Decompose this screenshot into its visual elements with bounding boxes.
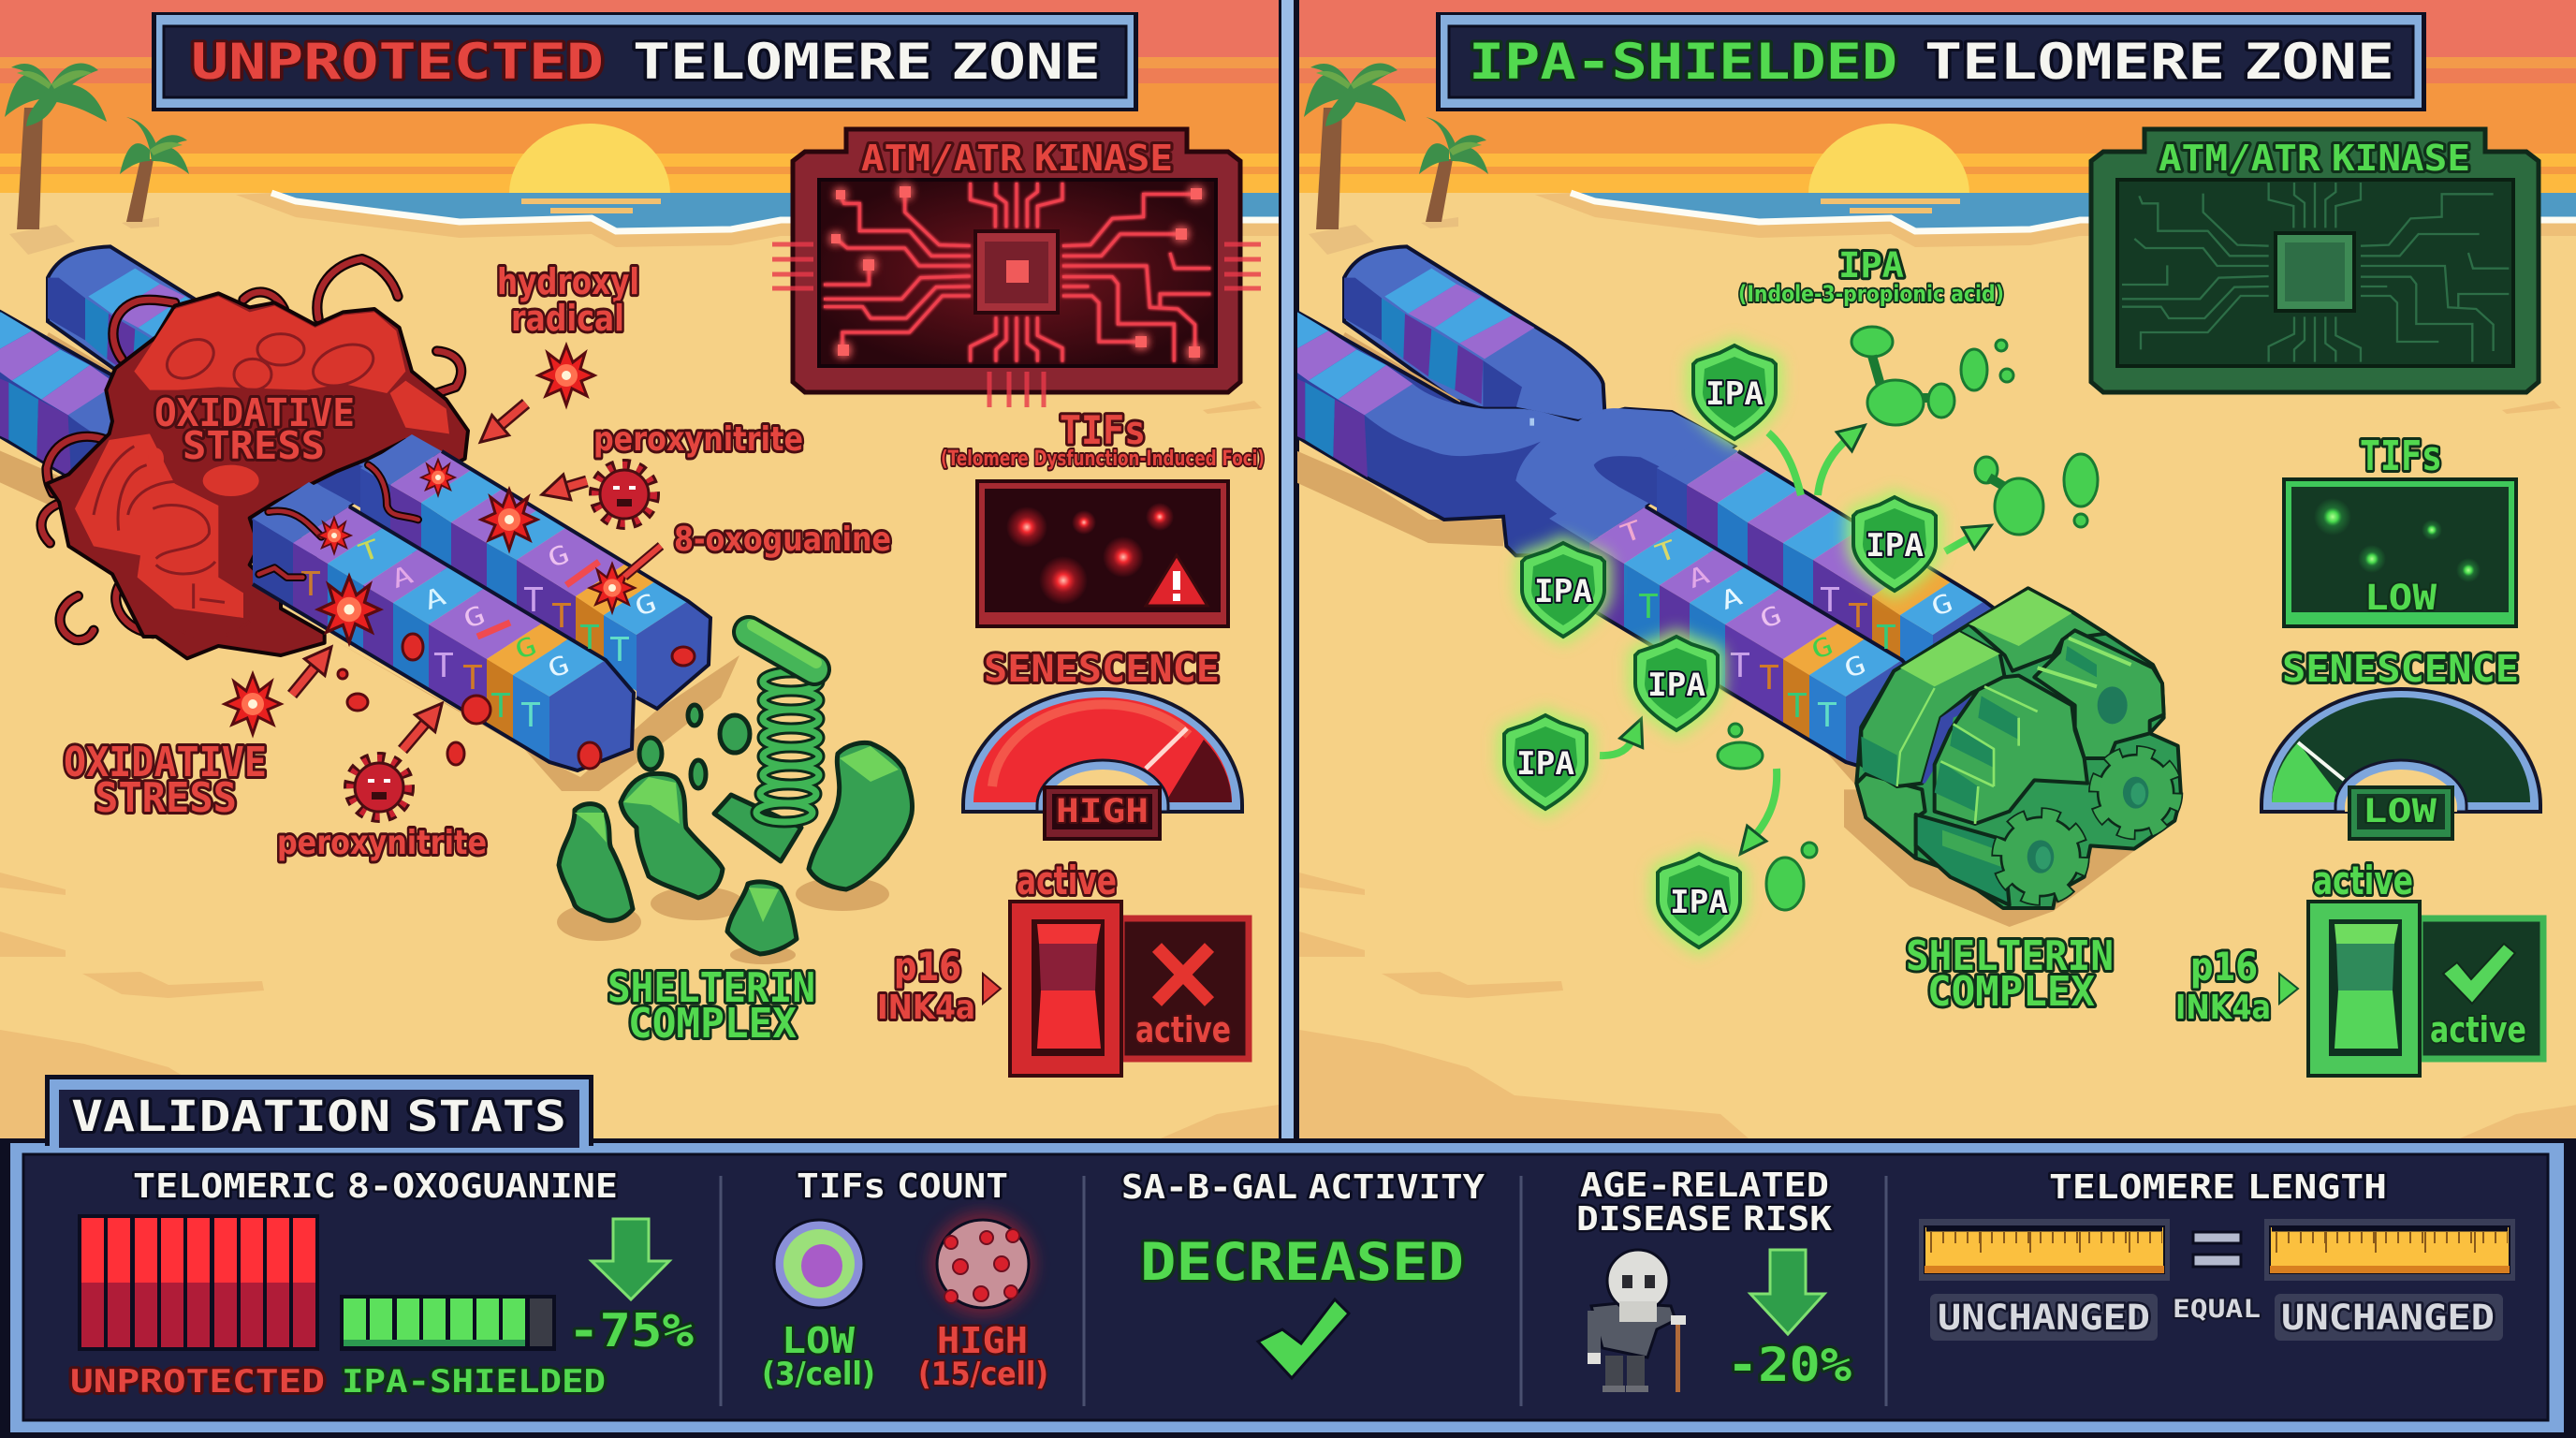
title: IPA-shielded — [1436, 12, 2426, 111]
telomere letters right: G — [1927, 587, 1956, 623]
cell labels: (3/cell) — [762, 1356, 875, 1393]
burst: small damage lower — [317, 518, 351, 553]
p16 label: p16 — [894, 944, 961, 990]
telomere letters left: T — [490, 687, 511, 726]
label: oxidative stress lower — [63, 742, 268, 814]
telomere letters right: T — [1876, 619, 1896, 657]
circuit traces red — [824, 183, 1210, 362]
icon: equals sign — [2193, 1232, 2241, 1267]
stat: age-related disease risk: DISEASE RISK — [1576, 1200, 1832, 1239]
telomere letters left: T — [433, 647, 454, 685]
ruler: unprotected — [1919, 1219, 2170, 1281]
stat: age-related disease risk: AGE-RELATED — [1580, 1167, 1829, 1205]
switch label: active — [2430, 1009, 2526, 1050]
title: unprotected — [152, 12, 1138, 111]
panel divider — [1279, 0, 1297, 1148]
badge: unchanged right: UNCHANGED — [2281, 1298, 2495, 1338]
TIFs panel green — [2284, 479, 2516, 626]
stat: telomere length: TELOMERE LENGTH — [2049, 1168, 2387, 1207]
telomere legs left — [253, 434, 710, 770]
cell labels: LOW — [782, 1320, 855, 1361]
stat dividers — [721, 1176, 1886, 1406]
telomere letters left: A — [420, 580, 449, 616]
shield: IPA 1 — [1693, 345, 1776, 439]
cell labels — [762, 1320, 1048, 1393]
telomere assembly right — [1279, 246, 2007, 770]
icon: peroxynitrite upper — [595, 465, 653, 523]
label: shelterin complex right: COMPLEX — [1927, 968, 2095, 1016]
panel: IPA-shielded telomere zone — [1279, 0, 2576, 1138]
stat: TIFs count — [762, 1167, 1048, 1393]
stat: TIFs count: TIFs COUNT — [797, 1167, 1008, 1206]
icon: check mark — [2443, 944, 2515, 1004]
label: oxidative stress in cloud: OXIDATIVE — [154, 390, 355, 435]
title: unprotected: TELOMERE ZONE — [633, 34, 1101, 91]
label: oxidative stress lower: STRESS — [95, 774, 237, 822]
title: IPA-shielded: TELOMERE ZONE — [1925, 34, 2394, 91]
label: oxidative stress in cloud — [154, 395, 356, 462]
shelterin shadow — [1844, 789, 2174, 927]
gauge value: LOW — [2363, 793, 2437, 830]
badge: unchanged left: UNCHANGED — [1938, 1298, 2150, 1338]
p16 label: p16 — [2190, 944, 2258, 990]
beach background right — [1299, 0, 2576, 1138]
damage marks on telomere — [338, 562, 695, 769]
label: ATM/ATR kinase: ATM/ATR KINASE — [861, 138, 1173, 179]
intact shelterin complex — [1844, 588, 2181, 927]
telomere letters right: T — [1617, 514, 1646, 550]
cloud lobes — [75, 297, 449, 618]
value: decreased: DECREASED — [1140, 1232, 1464, 1292]
TIFs heading — [941, 407, 1265, 471]
p16 label — [877, 944, 975, 1027]
arrows toward telomere — [292, 404, 661, 750]
label above switch: active — [2313, 858, 2413, 903]
telomere letters left: T — [520, 697, 541, 735]
stat: telomeric 8-oxoguanine: TELOMERIC 8-OXOGUANINE — [133, 1167, 618, 1206]
arrow to switch — [2279, 974, 2298, 1004]
label: shelterin complex — [607, 968, 816, 1041]
telomere letters left: T — [609, 631, 630, 669]
telomere letters left: T — [579, 619, 600, 657]
label: IPA name — [1738, 245, 2004, 307]
tendrils over telomere — [259, 465, 418, 578]
label: peroxynitrite upper: peroxynitrite — [593, 420, 803, 459]
TIFs heading green: TIFs — [2360, 433, 2442, 480]
ruler: IPA-shielded — [2264, 1219, 2515, 1281]
shield: IPA 6: IPA — [1670, 884, 1728, 921]
icon: damaged cell — [930, 1211, 1035, 1316]
TIFs heading: (Telomere Dysfunction-Induced Foci) — [941, 448, 1265, 471]
burst: damage on back strand — [481, 490, 537, 550]
shield: IPA 4 — [1635, 637, 1718, 730]
chip red — [973, 229, 1060, 315]
telomere letters right: T — [1638, 588, 1659, 626]
upper gear — [2034, 630, 2164, 758]
telomere letters right: A — [1717, 580, 1746, 616]
label: equal: EQUAL — [2173, 1295, 2261, 1324]
icon: healthy cell — [774, 1220, 864, 1308]
p16 label: INK4a — [2175, 989, 2271, 1027]
arrow: down 75 — [592, 1219, 669, 1299]
telomere letters left: T — [300, 565, 321, 604]
shelterin solid silhouette — [1856, 588, 2181, 908]
telomere letters left: T — [551, 597, 572, 636]
cell labels: (15/cell) — [918, 1356, 1048, 1393]
telomere letters left — [300, 533, 660, 735]
stat: SA-B-GAL activity: SA-B-GAL ACTIVITY — [1121, 1168, 1485, 1207]
telomere letters right — [1617, 514, 1956, 735]
title: IPA-shielded: IPA-SHIELDED — [1469, 34, 1897, 91]
telomere letters right: T — [1759, 659, 1779, 697]
shield: IPA 4: IPA — [1647, 667, 1705, 704]
label: shelterin complex right — [1906, 932, 2114, 1016]
center gear block — [1935, 676, 2087, 824]
label: IPA name: IPA — [1838, 245, 1904, 286]
telomere letters right: A — [1684, 559, 1713, 594]
icon: peroxynitrite lower — [350, 758, 408, 816]
shield: IPA 2: IPA — [1866, 527, 1924, 565]
label: shelterin complex: SHELTERIN — [607, 964, 815, 1012]
cloud tendrils — [41, 259, 461, 640]
arrow to switch — [983, 974, 1001, 1004]
trace pads red — [831, 186, 1202, 358]
telomere letters left: A — [388, 559, 417, 594]
senescence gauge low — [2261, 689, 2540, 839]
stat: age-related disease risk — [1576, 1167, 1852, 1392]
IPA molecules — [1718, 327, 2098, 910]
telomere letters right: G — [1840, 649, 1869, 684]
stat: telomeric 8-oxoguanine — [70, 1167, 695, 1401]
gauge value: HIGH — [1056, 793, 1149, 830]
p16 label — [2175, 944, 2271, 1027]
shield: IPA 6 — [1658, 854, 1740, 947]
switch label: active — [1135, 1009, 1231, 1050]
label: shelterin complex: COMPLEX — [628, 1000, 797, 1048]
label: hydroxyl radical: radical — [511, 298, 624, 339]
telomere letters left: G — [460, 599, 489, 635]
arrows from IPA shields — [1600, 433, 1973, 838]
label: hydroxyl radical — [497, 261, 639, 339]
cell labels: HIGH — [937, 1320, 1028, 1361]
telomere letters right: T — [1651, 534, 1680, 569]
bar labels — [70, 1363, 606, 1401]
telomere letters left: G — [544, 538, 573, 574]
label: 8-oxoguanine: 8-oxoguanine — [674, 521, 891, 559]
label: hydroxyl radical: hydroxyl — [497, 261, 639, 302]
shield: IPA 5: IPA — [1516, 745, 1574, 783]
bar labels: UNPROTECTED — [70, 1363, 325, 1401]
senescence gauge high — [963, 689, 1242, 839]
p16 switch green — [2308, 902, 2543, 1076]
TIFs heading: TIFs — [1060, 407, 1146, 453]
chip green — [2274, 231, 2356, 313]
TIFs value: LOW — [2364, 578, 2437, 618]
telomere arms left — [0, 246, 438, 555]
tab: validation stats — [45, 1075, 593, 1148]
arrow: down 20 — [1750, 1250, 1824, 1334]
telomere legs right — [1549, 434, 2007, 770]
senescence heading red: SENESCENCE — [984, 648, 1220, 691]
bar: unprotected — [78, 1214, 319, 1351]
icon: warning triangle — [1146, 555, 1208, 606]
telomere letters right: G — [1808, 630, 1837, 666]
telomere letters right: T — [1817, 697, 1837, 735]
label: IPA name: (Indole-3-propionic acid) — [1738, 281, 2004, 307]
shield: IPA 2 — [1853, 497, 1936, 591]
shield: IPA 3: IPA — [1534, 573, 1592, 610]
icon: skeleton with cane — [1588, 1250, 1686, 1392]
shield: IPA 1: IPA — [1705, 375, 1764, 413]
kinase panel red — [772, 129, 1261, 407]
senescence heading green: SENESCENCE — [2282, 648, 2519, 691]
beach background left — [0, 0, 1310, 1138]
telomere letters left: T — [462, 659, 483, 697]
cloud body — [47, 293, 468, 658]
bar labels: IPA-SHIELDED — [342, 1363, 606, 1401]
label: oxidative stress in cloud: STRESS — [183, 423, 325, 468]
oxidative stress cloud — [41, 259, 468, 658]
stat: SA-B-GAL activity — [1121, 1168, 1485, 1378]
arch block — [1861, 588, 2106, 786]
stat: telomere length — [1919, 1168, 2515, 1341]
burst: damage on front strand — [318, 577, 380, 642]
telomere arms right — [1279, 246, 1734, 555]
telomere letters left: G — [544, 649, 573, 684]
label: peroxynitrite lower: peroxynitrite — [277, 824, 487, 862]
telomere letters right: T — [1730, 647, 1750, 685]
bar: IPA-shielded — [340, 1295, 556, 1351]
telomere letters right: T — [1787, 687, 1808, 726]
tab: validation stats: VALIDATION STATS — [71, 1092, 566, 1141]
shield: IPA 3 — [1522, 543, 1604, 637]
broken shelterin complex — [557, 625, 913, 964]
value: -20%: -20% — [1727, 1338, 1852, 1392]
TIFs panel red — [977, 481, 1228, 626]
label: oxidative stress lower: OXIDATIVE — [64, 739, 267, 786]
cloud swirl lines — [94, 331, 379, 638]
icon: X mark — [1157, 947, 1209, 1002]
circuit traces green — [2122, 183, 2509, 362]
shield: IPA 5 — [1504, 715, 1587, 809]
label: ATM/ATR kinase: ATM/ATR KINASE — [2159, 138, 2470, 179]
p16 label: INK4a — [877, 989, 975, 1027]
icon: hydroxyl radical — [538, 345, 594, 405]
p16 switch red — [1010, 902, 1249, 1076]
telomere letters right: G — [1756, 599, 1785, 635]
gear bottom — [1999, 815, 2082, 898]
title: unprotected: UNPROTECTED — [191, 34, 604, 91]
telomere letters right: T — [1848, 597, 1868, 636]
label above switch: active — [1017, 858, 1117, 903]
telomere letters left: T — [355, 533, 384, 568]
lower blocks — [1856, 774, 2010, 905]
gear right — [2097, 754, 2174, 831]
burst: small damage upper — [421, 460, 455, 495]
telomere letters left: G — [631, 587, 660, 623]
telomere letters left: T — [523, 581, 544, 620]
telomere letters right: T — [1820, 581, 1840, 620]
kinase panel green — [2091, 129, 2539, 392]
value: -75%: -75% — [568, 1304, 695, 1357]
icon: check — [1258, 1299, 1349, 1378]
icon: free radical lower — [225, 674, 281, 734]
panel: validation stats — [5, 1075, 2571, 1436]
label: shelterin complex right: SHELTERIN — [1906, 932, 2114, 980]
telomere letters left: G — [511, 630, 540, 666]
burst: damage at 8-oxoguanine — [590, 564, 635, 612]
panel: unprotected telomere zone — [0, 0, 1310, 1138]
